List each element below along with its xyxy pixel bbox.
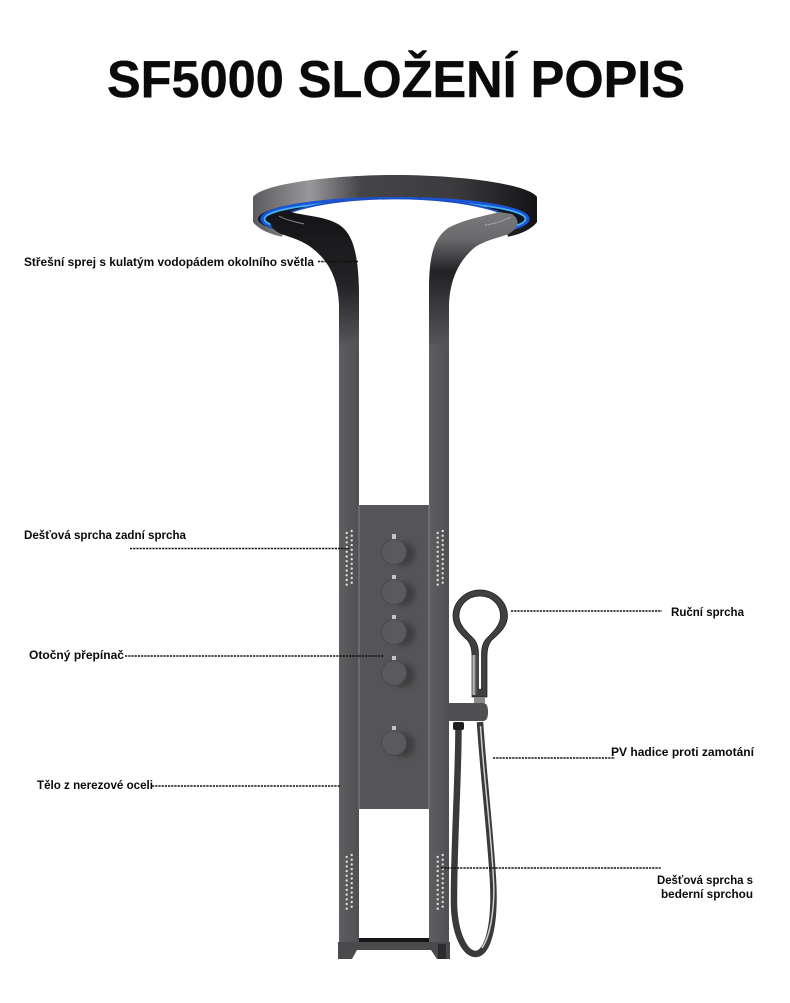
label: hand shower: Ruční sprcha [671,605,744,619]
label: rain lumbar shower [441,868,753,901]
left arm [270,212,359,345]
shower holder [449,703,488,721]
control panel [359,505,429,809]
label: stainless body: Tělo z nerezové oceli [37,778,153,792]
base [338,942,450,959]
label: PV hose: PV hadice proti zamotání [611,745,755,759]
left column [339,345,359,943]
right arm [429,212,518,345]
label: rain lumbar shower: Dešťová sprcha s [657,873,753,887]
shower panel product illustration [253,175,537,959]
label: rain back shower: Dešťová sprcha zadní sprcha [24,528,186,542]
spray nozzles [347,531,443,911]
label: rotary switch: Otočný přepínač [29,648,124,662]
label: roof spray: Střešní sprej s kulatým vodopádem okolního světla [24,255,314,269]
hose nut [453,722,464,730]
right column [429,345,449,943]
label: rain lumbar shower: bederní sprchou [661,887,753,901]
title: SF5000 SLOŽENÍ POPIS [107,50,685,109]
round ambient light top spray [253,175,537,242]
hand shower [453,590,508,703]
rotary knobs [382,534,415,757]
left arm highlight [279,216,304,224]
right arm highlight [485,217,511,225]
hose [454,722,494,954]
